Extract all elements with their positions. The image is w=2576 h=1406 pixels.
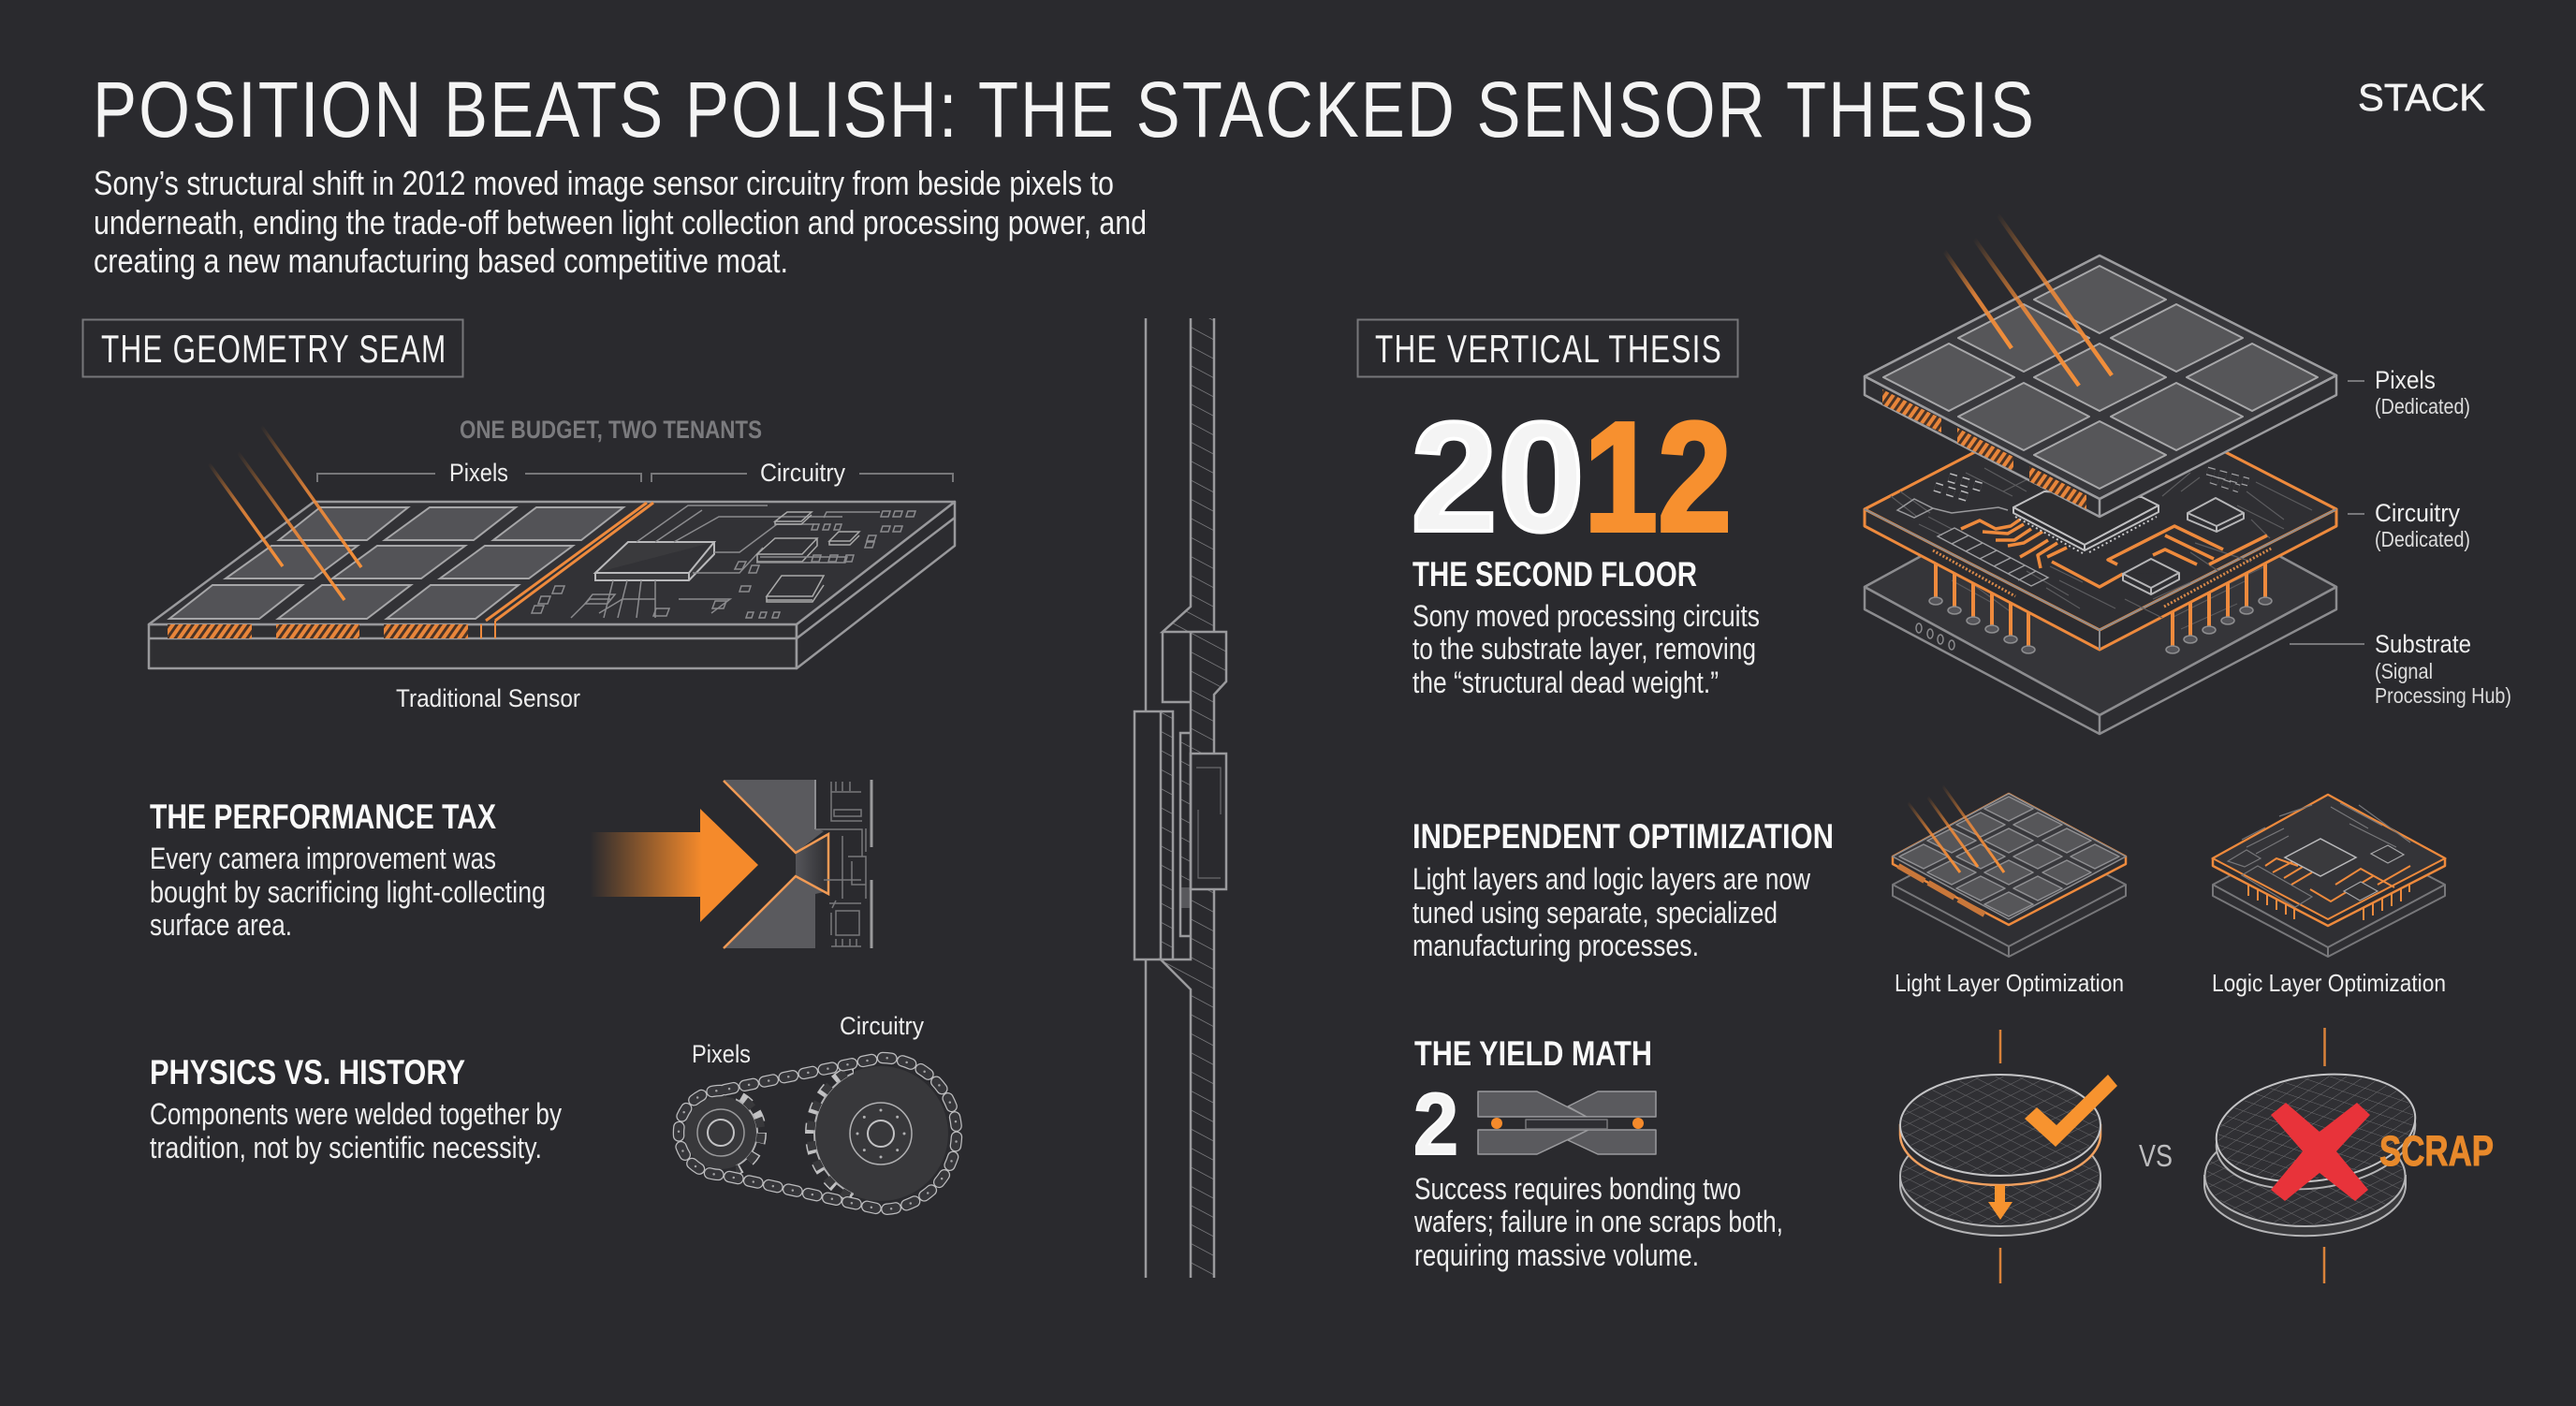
orange guide lines — [2323, 1028, 2326, 1283]
red x mark — [2271, 1103, 2370, 1201]
label pixels: Pixels — [692, 1040, 751, 1068]
text block: the yield math: THE YIELD MATH — [1414, 1034, 1652, 1073]
brand label: STACK — [2358, 76, 2485, 119]
text block: the yield math — [1413, 1034, 1783, 1272]
labels: stack layers — [2290, 366, 2511, 708]
text block: the yield math: 2 — [1413, 1075, 1458, 1173]
small chips — [2123, 498, 2244, 594]
diagram: exploded stack — [1865, 214, 2336, 734]
mini circuit detail — [2228, 803, 2410, 907]
text block: the second floor: to the substrate layer, removing — [1412, 632, 1756, 666]
subtitle: creating a new manufacturing based competitive moat. — [94, 242, 788, 280]
circuit board detail — [1891, 468, 2312, 618]
brackets: pixels and circuitry: Pixels — [449, 459, 508, 487]
faint substrate traces — [1952, 566, 2265, 632]
hatched pixel edges — [168, 624, 468, 638]
label circuitry: Circuitry — [840, 1012, 924, 1040]
text block: the second floor — [1412, 555, 1760, 699]
text block: independent optimization: manufacturing processes. — [1412, 929, 1699, 962]
text block: independent optimization: tuned using separate, specialized — [1412, 896, 1778, 930]
light rays — [1944, 214, 2112, 386]
text block: physics vs. history: Components were welded together by — [150, 1097, 562, 1131]
text block: the yield math: wafers; failure in one scraps both, — [1413, 1205, 1783, 1238]
text block: the second floor: THE SECOND FLOOR — [1412, 555, 1697, 593]
subtitle: Sony’s structural shift in 2012 moved image sensor circuitry from beside pixels to — [94, 164, 1114, 202]
pixel tiles — [169, 507, 623, 619]
roller chain — [679, 1058, 957, 1209]
label: scrap: SCRAP — [2379, 1127, 2494, 1175]
pin feet — [1929, 597, 2272, 653]
captions: optimization layers: Logic Layer Optimization — [2212, 969, 2446, 997]
diagram: logic layer optimization — [2213, 795, 2445, 957]
check mark — [2025, 1075, 2117, 1147]
labels: stack layers: Substrate — [2375, 630, 2471, 658]
circuitry layer — [1865, 388, 2336, 650]
brackets: pixels and circuitry — [317, 459, 953, 487]
orange guide lines — [1999, 1030, 2001, 1283]
pixel tiles — [1883, 266, 2318, 489]
central divider: cross-section — [1134, 318, 1226, 1278]
main processor chip — [2013, 491, 2159, 553]
big number: 2012: 12 — [1584, 390, 1732, 564]
label: vs: VS — [2139, 1138, 2173, 1173]
icon: wafer bond — [1478, 1091, 1656, 1154]
diagram: light layer optimization — [1893, 785, 2126, 957]
section heading: the geometry seam: THE GEOMETRY SEAM — [101, 327, 446, 371]
title: POSITION BEATS POLISH: THE STACKED SENSOR THESIS — [93, 66, 2034, 154]
icon: chain and sprockets — [679, 1012, 957, 1209]
text block: the performance tax: bought by sacrificing light-collecting — [150, 875, 546, 909]
labels: stack layers: (Dedicated) — [2375, 527, 2470, 551]
substrate layer — [1865, 459, 2336, 734]
connection pins — [1936, 557, 2265, 649]
labels: stack layers: Processing Hub) — [2375, 683, 2511, 708]
mini rays — [1908, 785, 2004, 872]
section label: one budget, two tenants: ONE BUDGET, TWO TENANTS — [460, 416, 762, 444]
small sprocket — [680, 1091, 762, 1174]
text block: the yield math: requiring massive volume. — [1414, 1238, 1699, 1272]
down arrow — [1988, 1185, 2012, 1220]
captions: optimization layers — [1895, 969, 2446, 997]
caption: traditional sensor: Traditional Sensor — [396, 684, 580, 712]
icon: scrapped wafer pair — [2204, 1028, 2494, 1283]
text block: the performance tax — [150, 798, 546, 942]
diagram: traditional sensor — [149, 502, 955, 668]
subtitle — [94, 164, 1147, 280]
text block: physics vs. history — [150, 1053, 562, 1164]
big number: 2012 — [1411, 390, 1732, 564]
large sprocket — [810, 1062, 952, 1205]
pixel layer — [1865, 256, 2336, 517]
icon: orange arrow squeezing pixels — [590, 780, 871, 948]
text block: independent optimization: INDEPENDENT OPTIMIZATION — [1412, 817, 1834, 856]
captions: optimization layers: Light Layer Optimization — [1895, 969, 2124, 997]
labels: stack layers: Pixels — [2375, 366, 2436, 394]
text block: the second floor: the “structural dead weight.” — [1412, 666, 1719, 699]
slab body — [149, 502, 955, 668]
mini hatch edge — [1898, 866, 1984, 915]
text block: independent optimization — [1412, 817, 1834, 962]
labels: stack layers: (Dedicated) — [2375, 394, 2470, 418]
subtitle: underneath, ending the trade-off between light collection and processing power, and — [94, 203, 1147, 242]
text block: the performance tax: THE PERFORMANCE TAX — [150, 798, 496, 836]
circuitry details — [532, 505, 915, 618]
text block: physics vs. history: tradition, not by scientific necessity. — [150, 1131, 542, 1164]
text block: the yield math: Success requires bonding two — [1414, 1172, 1741, 1206]
hatched structure — [1161, 318, 1226, 1278]
big number: 2012: 20 — [1411, 390, 1585, 564]
text block: independent optimization: Light layers and logic layers are now — [1412, 862, 1811, 896]
substrate ports — [1916, 623, 1954, 650]
text block: physics vs. history: PHYSICS VS. HISTORY — [150, 1053, 465, 1091]
orange seam — [481, 503, 653, 638]
hatched sides — [1882, 389, 2086, 509]
text block: the second floor: Sony moved processing circuits — [1412, 599, 1760, 633]
section heading: the vertical thesis: THE VERTICAL THESIS — [1375, 327, 1721, 371]
text block: the performance tax: Every camera improvement was — [150, 842, 496, 875]
mini tiles — [1899, 797, 2119, 916]
labels: stack layers: Circuitry — [2375, 499, 2460, 527]
icon: good wafer pair — [1900, 1030, 2117, 1283]
labels: stack layers: (Signal — [2375, 659, 2433, 683]
text block: the performance tax: surface area. — [150, 908, 292, 942]
mini pins — [2248, 885, 2409, 920]
brackets: pixels and circuitry: Circuitry — [760, 459, 845, 487]
light rays on traditional sensor — [209, 426, 361, 600]
